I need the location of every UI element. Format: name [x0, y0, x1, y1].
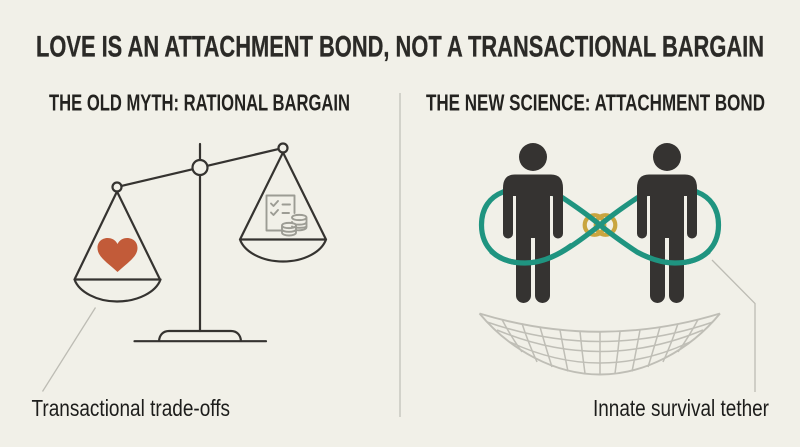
icon: checklist and coins: [266, 196, 306, 236]
left pan: [74, 192, 160, 302]
gold interlocked rings: [585, 215, 615, 235]
scale beam: [120, 149, 280, 186]
scale base: [134, 331, 266, 341]
safety net: [480, 314, 720, 374]
right hanger ring: [278, 144, 288, 152]
leader line: transactional: [42, 308, 96, 392]
label: transactional trade-offs: Transactional trade-offs: [32, 395, 230, 421]
right pan: [240, 152, 326, 262]
icon: heart: [98, 238, 138, 272]
scale post: [199, 144, 201, 331]
heading: old myth: THE OLD MYTH: RATIONAL BARGAIN: [49, 90, 350, 116]
pivot: [192, 160, 208, 175]
left hanger ring: [112, 182, 122, 192]
leader line: survival tether: [712, 260, 755, 392]
person left: [503, 143, 563, 303]
panel: attachment bond figures: [482, 143, 718, 303]
person right: [637, 143, 697, 303]
teal infinity tether behind figures: [482, 189, 718, 263]
teal tether in front of legs: [491, 245, 709, 263]
panel: balance scale: [74, 144, 326, 341]
